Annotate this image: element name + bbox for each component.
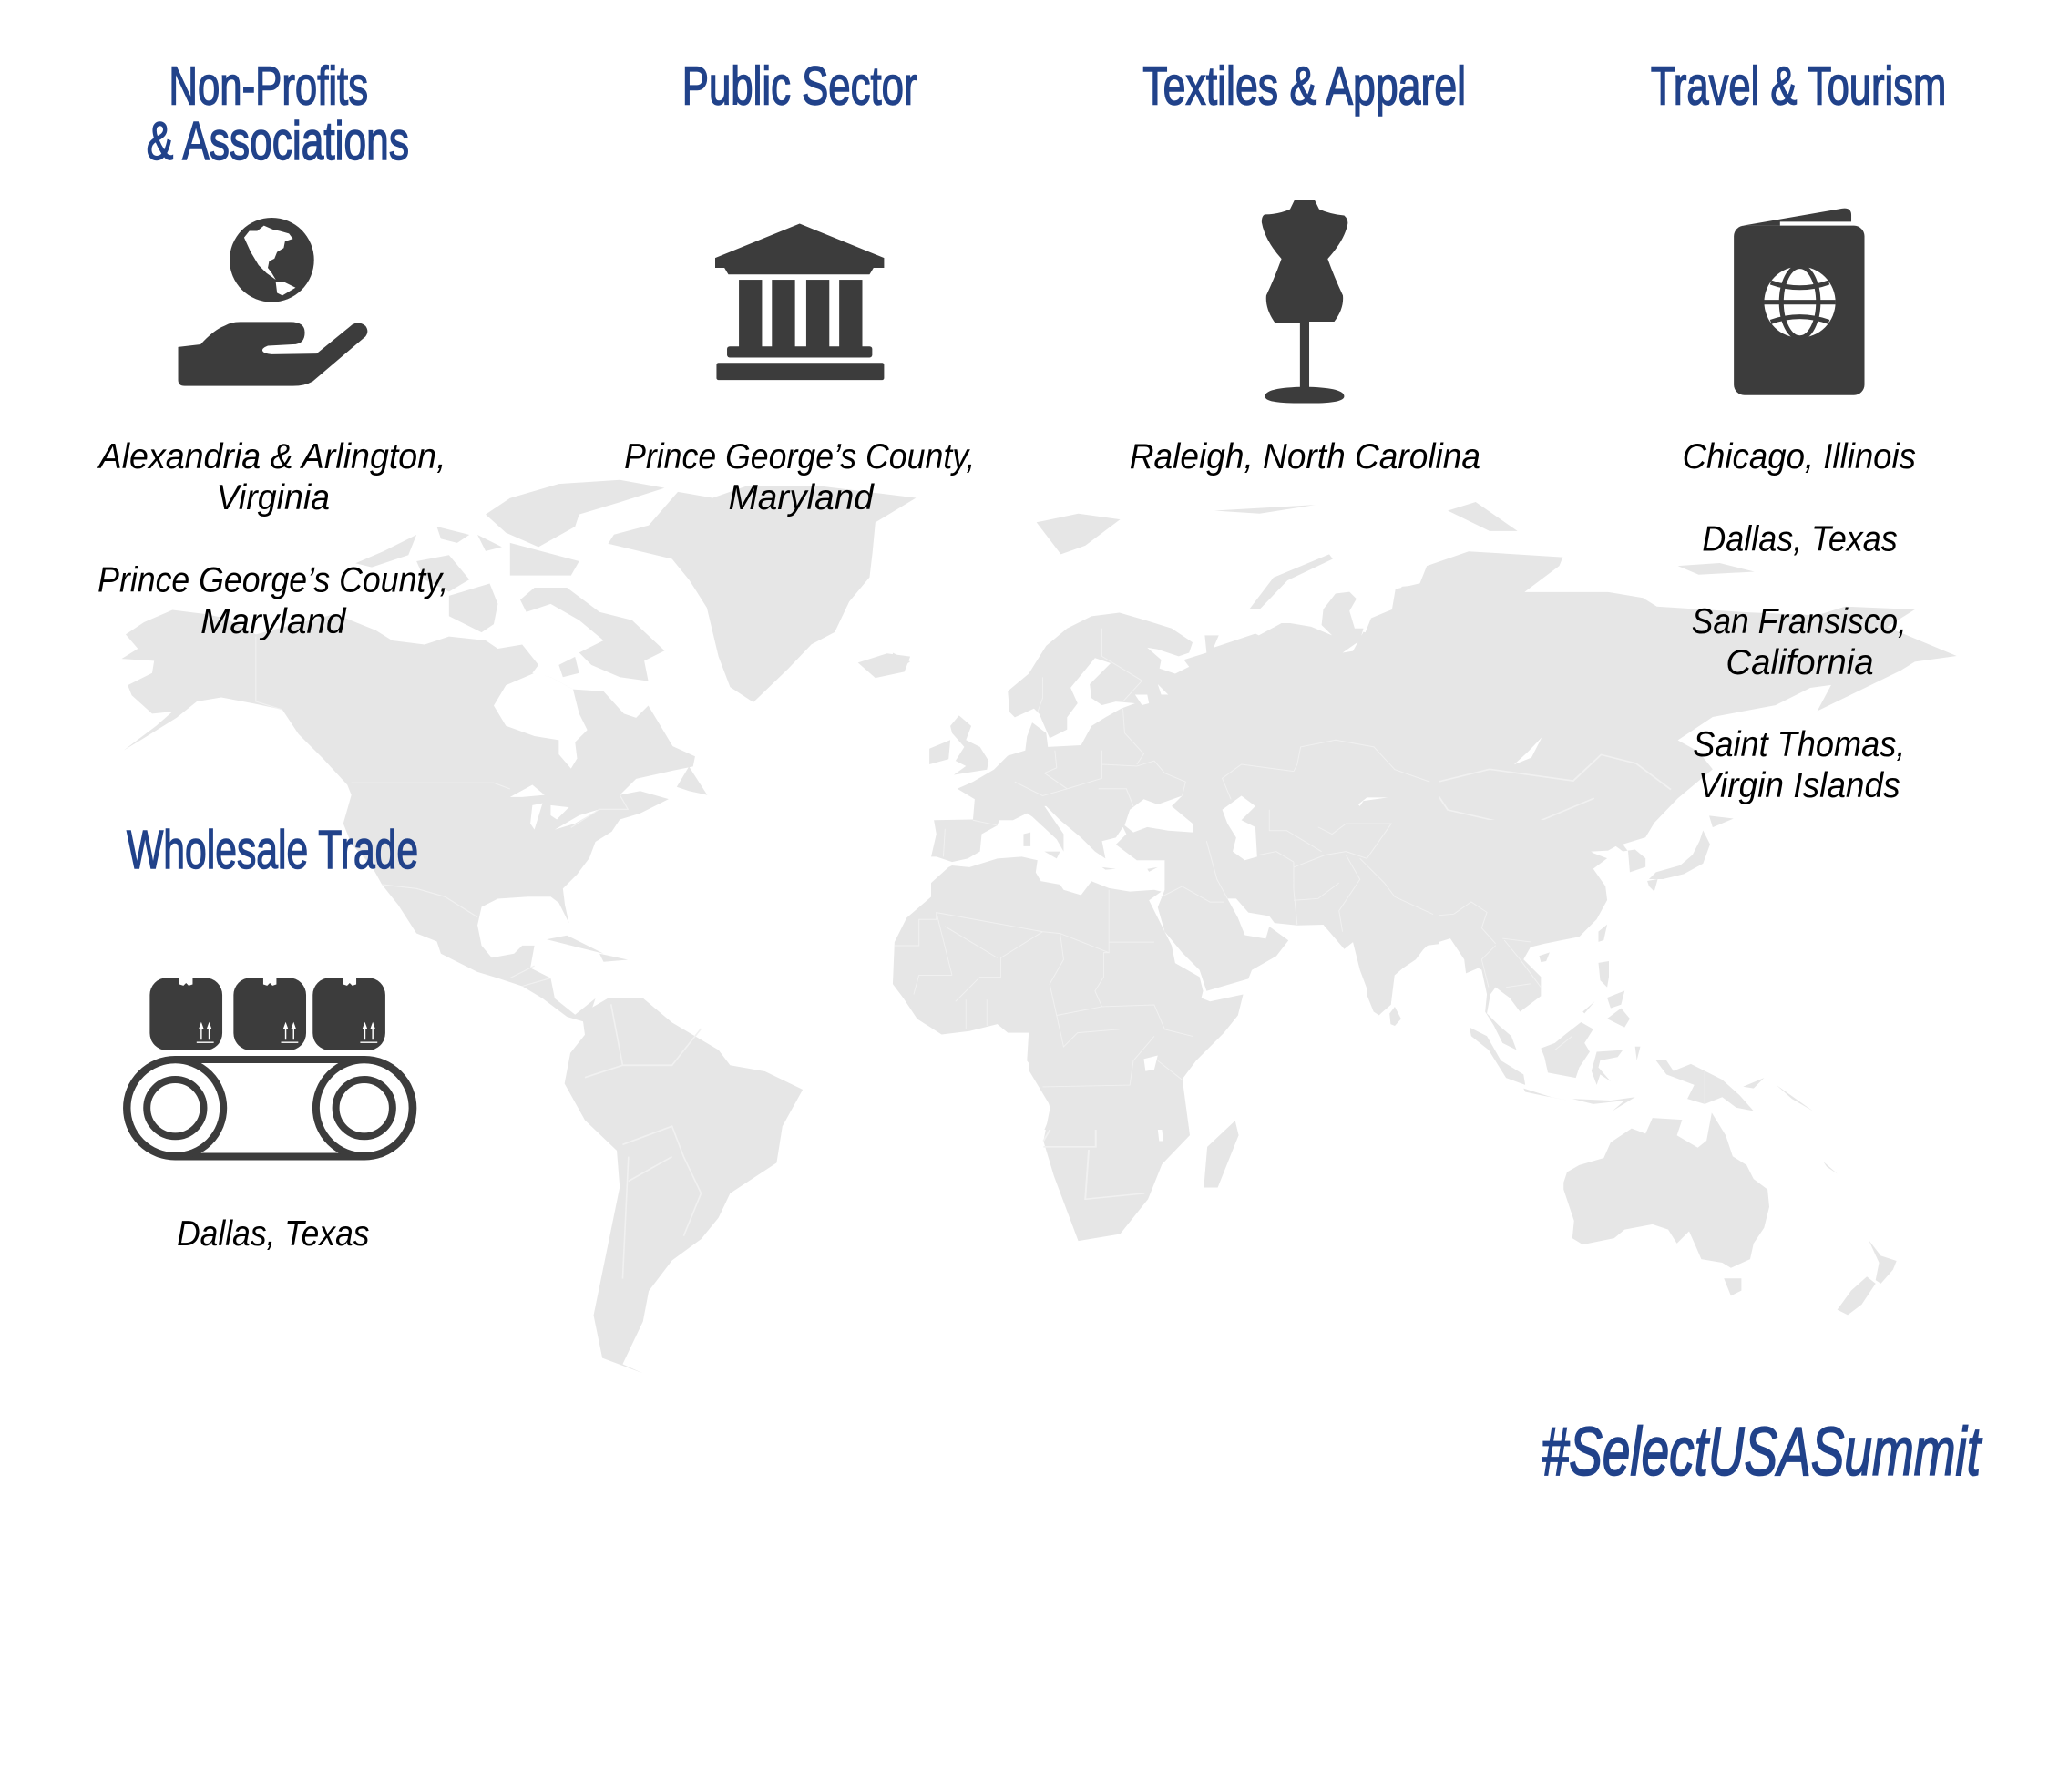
locations: Non-Profits: Alexandria & Arlington, [97, 437, 446, 476]
icon: passport [1734, 209, 1865, 395]
locations: Travel & Tourism: San Fransisco, [1692, 602, 1907, 641]
icon: conveyor belt with boxes [127, 978, 413, 1156]
location: Wholesale Trade: Dallas, Texas [177, 1214, 370, 1254]
icon: hand holding globe [179, 218, 367, 386]
panel: Wholesale Trade [127, 819, 418, 1254]
heading: Travel & Tourism: Travel & Tourism [1651, 55, 1946, 116]
locations: Travel & Tourism: Chicago, Illinois [1683, 437, 1916, 476]
heading: Textiles & Apparel: Textiles & Apparel [1142, 55, 1466, 116]
heading: Wholesale Trade: Wholesale Trade [127, 819, 418, 880]
locations: Non-Profits: Maryland [200, 602, 347, 641]
panel: Travel & Tourism [1651, 55, 1946, 805]
heading: Non-Profits & Associations [147, 55, 409, 171]
heading: Non-Profits & Associations: Non-Profits [169, 55, 368, 116]
map: Europe, Middle East, India and northern Africa [893, 583, 1439, 1130]
locations: Public Sector [624, 437, 975, 517]
locations: Public Sector: Maryland [728, 478, 875, 517]
heading: Non-Profits & Associations: & Associations [147, 110, 409, 171]
locations: Travel & Tourism: California [1726, 643, 1874, 682]
world map [121, 480, 1957, 1373]
icon: government building [715, 223, 884, 380]
panel: Non-Profits & Associations [97, 55, 448, 641]
icon: dress form mannequin [1262, 200, 1347, 404]
locations: Public Sector: Prince George’s County, [624, 437, 975, 476]
locations: Non-Profits: Prince George’s County, [97, 561, 448, 600]
map: China, Southeast Asia and Oceania [1367, 820, 1897, 1315]
locations: Non-Profits: Virginia [217, 478, 330, 517]
locations: Non-Profits [97, 437, 448, 641]
map: Siberia, far east, arctic islands, southern Africa [1029, 502, 1957, 1241]
panel: Public Sector [624, 55, 975, 517]
map: North America [121, 480, 707, 1023]
heading: Public Sector: Public Sector [682, 55, 917, 116]
map: South America, Greenland and Iceland [565, 486, 916, 1373]
locations: Travel & Tourism: Saint Thomas, [1693, 725, 1905, 764]
locations: Travel & Tourism: Dallas, Texas [1702, 520, 1898, 559]
location: Textiles & Apparel: Raleigh, North Carolina [1130, 437, 1480, 476]
locations: Travel & Tourism [1683, 437, 1916, 805]
locations: Travel & Tourism: Virgin Islands [1698, 766, 1900, 805]
panel: Textiles & Apparel [1130, 55, 1480, 476]
